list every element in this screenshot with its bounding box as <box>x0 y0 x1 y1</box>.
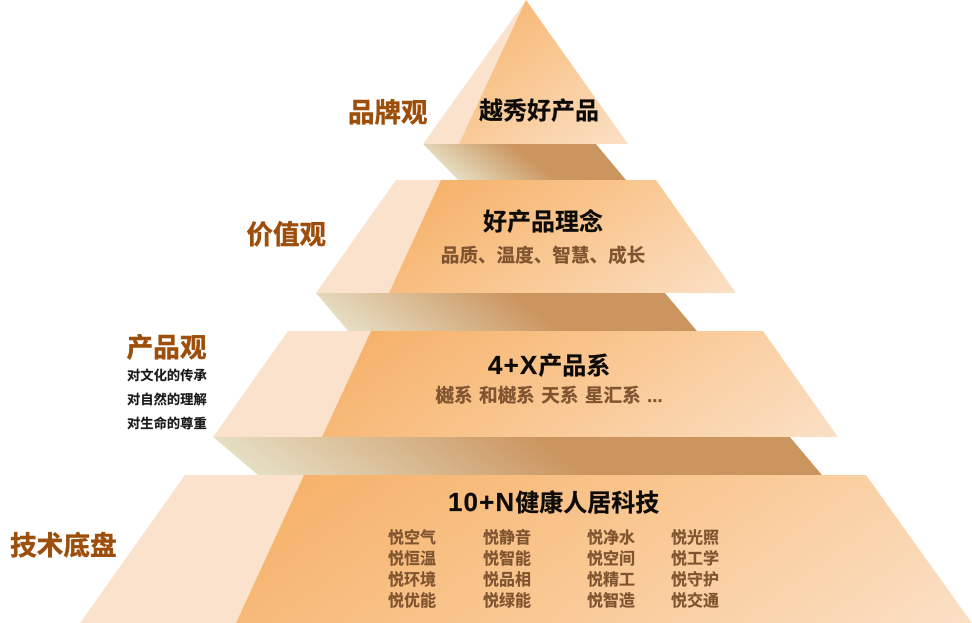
product view notes <box>127 367 207 431</box>
technology list column 1: 悦优能 <box>388 591 436 610</box>
connector band under products tier <box>213 437 822 475</box>
technology list column 3: 悦精工 <box>587 570 635 589</box>
side label: product view <box>126 326 207 431</box>
technology list column 2: 悦静音 <box>483 528 531 547</box>
pyramid tier: products <box>213 331 838 437</box>
pyramid tier: technology base <box>80 475 972 623</box>
technology list column 2: 悦绿能 <box>483 591 531 610</box>
technology list column 3: 悦空间 <box>587 549 635 568</box>
technology list column 4: 悦工学 <box>671 549 719 568</box>
side label: values view: 价值观 <box>246 213 326 252</box>
side label: product view: 产品观 <box>126 326 207 365</box>
technology list column 2: 悦品相 <box>483 571 531 589</box>
side label: brand view: 品牌观 <box>348 91 428 130</box>
technology list column 3 <box>587 528 635 610</box>
side label: technology base: 技术底盘 <box>10 524 117 563</box>
technology list column 4 <box>671 529 719 610</box>
technology list column 4: 悦交通 <box>671 591 719 610</box>
values subtext: 品质、温度、智慧、成长 <box>441 245 646 266</box>
products subtext: 樾系 和樾系 天系 星汇系 ... <box>435 385 663 406</box>
technology list column 3: 悦智造 <box>587 591 635 610</box>
apex heading: 越秀好产品 <box>479 98 599 125</box>
pyramid tier: values <box>316 180 736 293</box>
values heading: 好产品理念 <box>483 208 603 236</box>
technology list column 1: 悦环境 <box>388 570 436 589</box>
products heading: 4+X产品系 <box>488 350 610 380</box>
product view notes: 对生命的尊重 <box>127 415 207 431</box>
technology list column 1: 悦空气 <box>388 528 436 547</box>
technology heading: 10+N健康人居科技 <box>448 487 659 517</box>
product view notes: 对自然的理解 <box>127 391 207 407</box>
product view notes: 对文化的传承 <box>127 367 207 383</box>
technology list column 2 <box>483 528 531 610</box>
connector band under apex tier <box>423 144 626 180</box>
technology list column 4: 悦守护 <box>671 570 719 589</box>
pyramid tier: brand apex <box>423 0 628 144</box>
technology list column 4: 悦光照 <box>671 529 719 547</box>
technology list column 2: 悦智能 <box>483 549 531 568</box>
technology list column 3: 悦净水 <box>587 528 635 547</box>
technology list column 1 <box>388 528 436 610</box>
connector band under values tier <box>316 293 697 331</box>
technology list column 1: 悦恒温 <box>388 550 436 568</box>
